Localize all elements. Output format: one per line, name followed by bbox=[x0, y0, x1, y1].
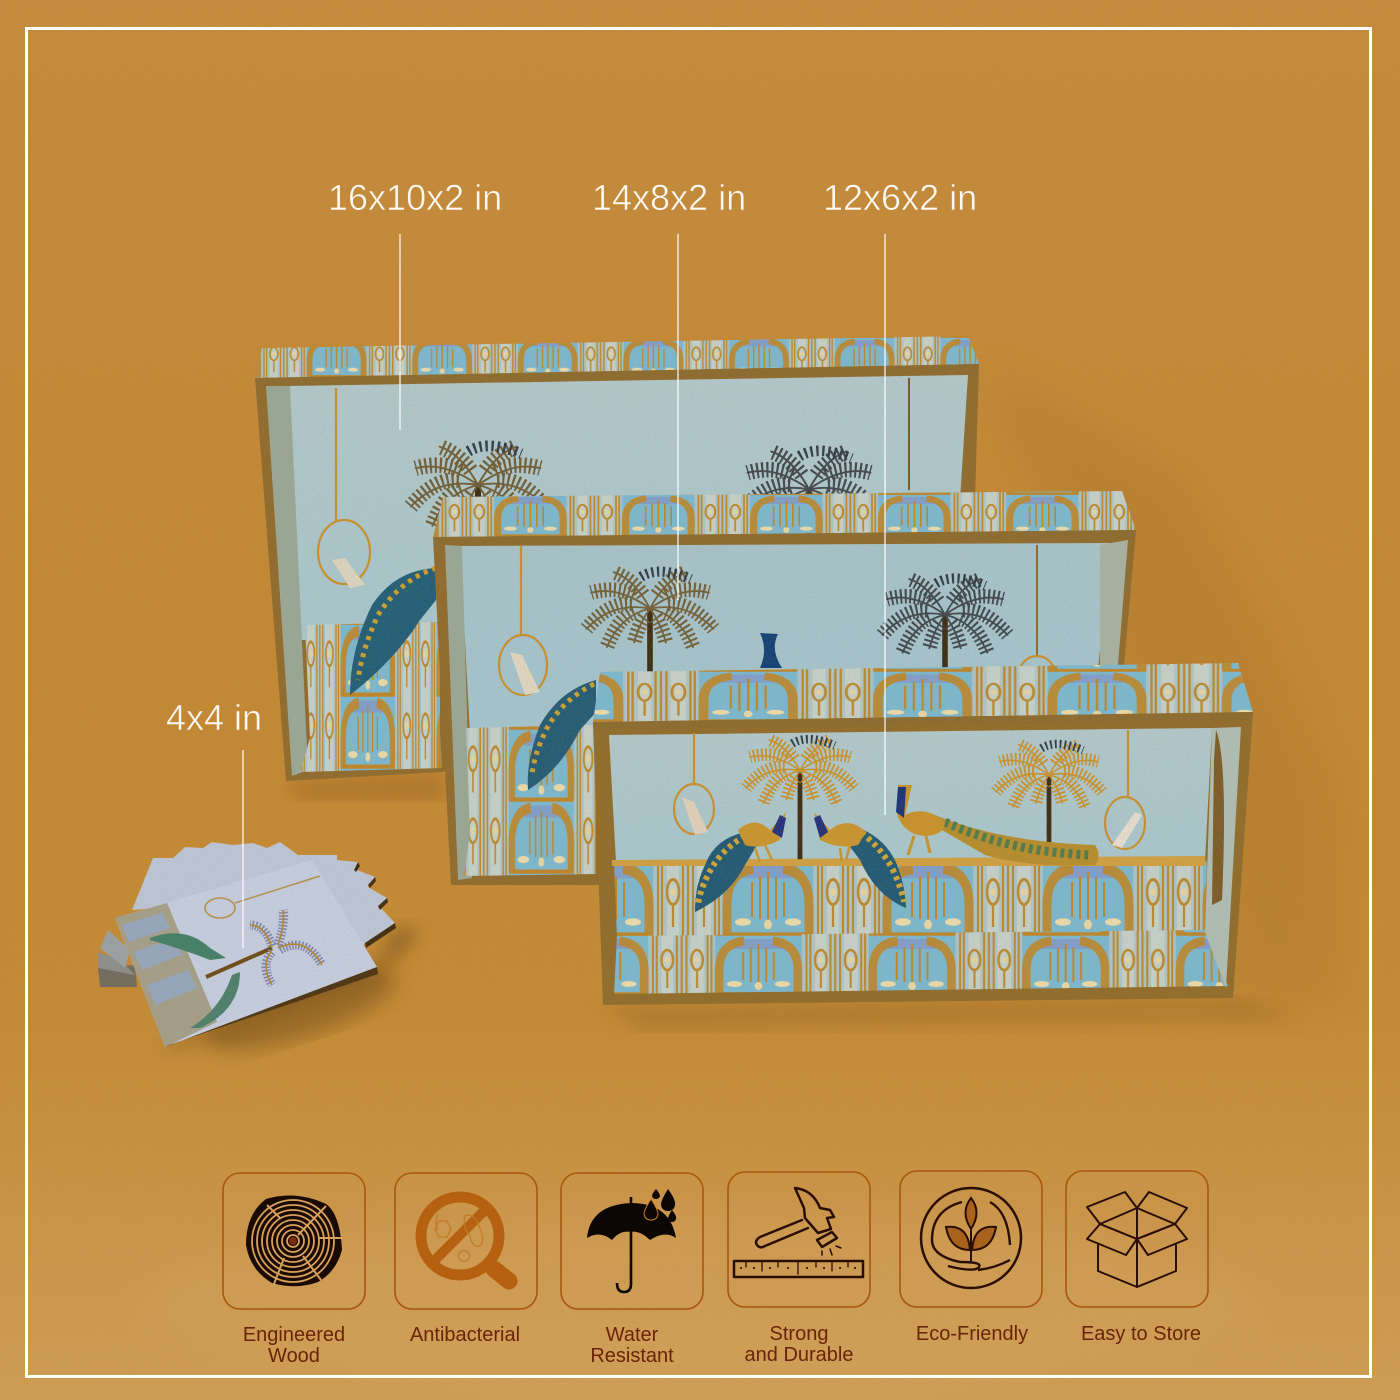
large tray frame bbox=[255, 364, 979, 781]
label: Antibacterial bbox=[410, 1324, 520, 1346]
label: Wood bbox=[268, 1345, 320, 1367]
medium tray swing bbox=[499, 546, 547, 695]
top coaster bbox=[115, 860, 378, 1047]
small tray middle peacock bbox=[814, 812, 906, 908]
small tray swings bbox=[674, 733, 714, 835]
medium tray peacock bbox=[528, 633, 782, 790]
feature: easy to store bbox=[1066, 1171, 1208, 1345]
small tray 12x6x2 bbox=[593, 663, 1253, 1005]
coaster fan behind bbox=[132, 842, 395, 960]
feature: strong and durable bbox=[728, 1172, 870, 1366]
large tray back wall bbox=[288, 375, 968, 640]
large tray 16x10x2 bbox=[255, 336, 979, 781]
medium tray side bbox=[445, 545, 472, 880]
icon: open box bbox=[1087, 1192, 1187, 1287]
feature: antibacterial bbox=[395, 1173, 537, 1346]
medium tray top rim bbox=[433, 491, 1136, 537]
medium tray back wall bbox=[460, 543, 1110, 735]
small tray lower wall pattern bbox=[614, 860, 1207, 938]
small tray right wall bbox=[1205, 727, 1241, 988]
feature: engineered wood bbox=[223, 1173, 365, 1367]
label: Engineered bbox=[243, 1324, 345, 1346]
large tray peacock bbox=[350, 568, 436, 695]
coaster stack edges left bbox=[98, 930, 137, 987]
label: and Durable bbox=[745, 1344, 853, 1366]
medium tray right swing bbox=[1017, 545, 1057, 704]
small tray left peacock bbox=[695, 812, 786, 912]
large tray top rim bbox=[255, 336, 979, 378]
large tray side bbox=[266, 386, 308, 776]
icon: plant in hand bbox=[921, 1188, 1021, 1288]
large tray swing bbox=[318, 388, 370, 588]
label: Water bbox=[606, 1324, 659, 1346]
small tray rail bbox=[612, 856, 1205, 866]
large tray palms bbox=[411, 446, 545, 595]
icon: umbrella bbox=[587, 1189, 676, 1292]
icon: magnifier with bacteria bbox=[421, 1197, 509, 1281]
small tray frame bbox=[593, 712, 1253, 1005]
icon: tree rings bbox=[246, 1195, 342, 1286]
label: Eco-Friendly bbox=[916, 1323, 1028, 1345]
label: Strong bbox=[770, 1323, 828, 1345]
feature: eco-friendly bbox=[900, 1171, 1042, 1345]
coaster peacocks bbox=[150, 933, 226, 960]
tray shadows bbox=[286, 370, 1340, 1030]
dimension 14x8x2: 14x8x2 in bbox=[592, 177, 746, 218]
feature: water resistant bbox=[561, 1173, 703, 1367]
label: Resistant bbox=[590, 1345, 674, 1367]
coaster swing bbox=[205, 876, 320, 918]
dimension 16x10x2: 16x10x2 in bbox=[328, 177, 502, 218]
icon: hammer and ruler bbox=[734, 1188, 863, 1277]
coaster shadow bbox=[165, 930, 420, 1050]
dimension 4x4: 4x4 in bbox=[166, 697, 262, 738]
coasters bbox=[98, 842, 420, 1068]
medium tray frame bbox=[433, 530, 1136, 885]
medium tray 14x8x2 bbox=[433, 491, 1136, 885]
dimension 12x6x2: 12x6x2 in bbox=[823, 177, 977, 218]
coaster palm bbox=[206, 910, 322, 985]
small tray top rim bbox=[593, 663, 1253, 722]
small tray palms bbox=[746, 739, 854, 859]
medium tray palms bbox=[587, 572, 713, 713]
small tray floor bbox=[614, 930, 1228, 994]
small tray long tail peacock bbox=[896, 785, 1098, 866]
label: Easy to Store bbox=[1081, 1323, 1201, 1345]
small tray back wall bbox=[609, 728, 1212, 862]
